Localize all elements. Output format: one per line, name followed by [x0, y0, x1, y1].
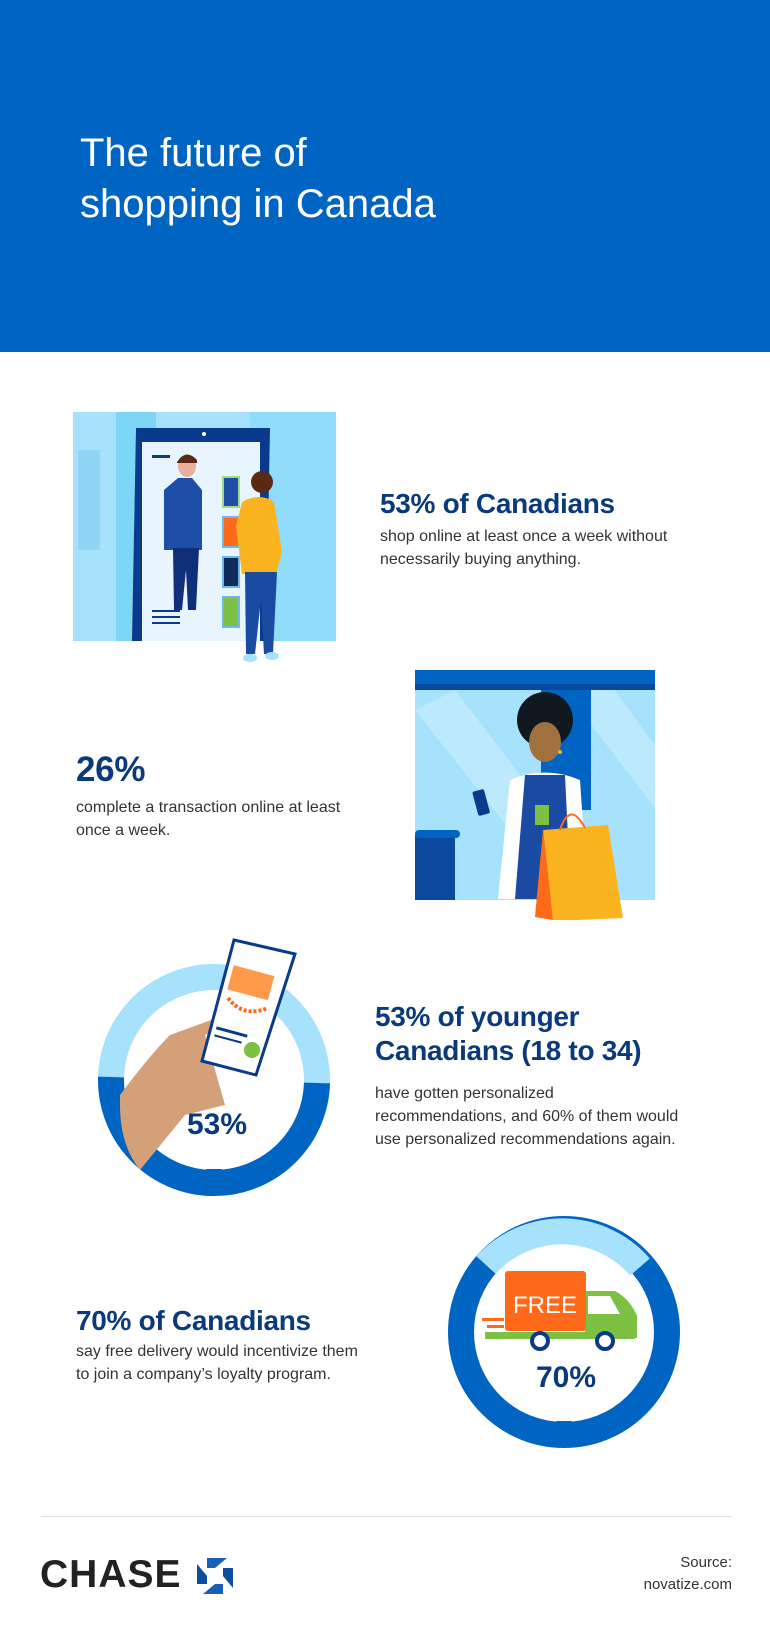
shopper — [251, 471, 273, 493]
stat 3 text: have gotten personalized — [375, 1085, 554, 1102]
donut label: 53% — [187, 1108, 247, 1141]
source: Source: — [680, 1554, 732, 1571]
stat 4 text: to join a company’s loyalty program. — [76, 1366, 331, 1383]
donut chart 53% with phone — [98, 938, 330, 1196]
source — [644, 1554, 732, 1593]
stat 1 text — [380, 488, 668, 568]
stat 3 text — [375, 1001, 678, 1148]
truck — [585, 1291, 637, 1338]
illustration: virtual fitting mirror — [73, 412, 336, 662]
stat 2 text: 26% — [76, 750, 145, 789]
title: The future of — [80, 131, 307, 175]
stat 4 text: say free delivery would incentivize them — [76, 1343, 358, 1360]
stat 3 text: use personalized recommendations again. — [375, 1131, 676, 1148]
stat 3 text: Canadians (18 to 34) — [375, 1035, 641, 1066]
stat 2 text: complete a transaction online at least once a week. — [76, 799, 340, 839]
donut label: 70% — [536, 1361, 596, 1394]
logo: CHASE: CHASE — [40, 1553, 182, 1596]
stat 2 text — [76, 750, 340, 839]
stat 3 text: 53% of younger — [375, 1001, 579, 1032]
stat 1 text: shop online at least once a week without necessarily buying anything. — [380, 528, 667, 568]
stat 4 text: 70% of Canadians — [76, 1305, 311, 1336]
source: novatize.com — [644, 1576, 732, 1593]
title — [80, 131, 436, 226]
phone — [202, 940, 295, 1075]
stat 4 text — [76, 1305, 358, 1383]
title: shopping in Canada — [80, 182, 436, 226]
illustration: shopper in store — [415, 670, 655, 920]
stat 1 text: 53% of Canadians — [380, 488, 615, 519]
stat 3 text: recommendations, and 60% of them would — [375, 1108, 678, 1125]
man in mirror — [178, 455, 196, 477]
hand — [120, 1015, 229, 1170]
donut chart 70% with truck: FREE — [513, 1292, 577, 1319]
donut chart 70% with truck — [448, 1216, 680, 1448]
header band — [0, 0, 770, 352]
